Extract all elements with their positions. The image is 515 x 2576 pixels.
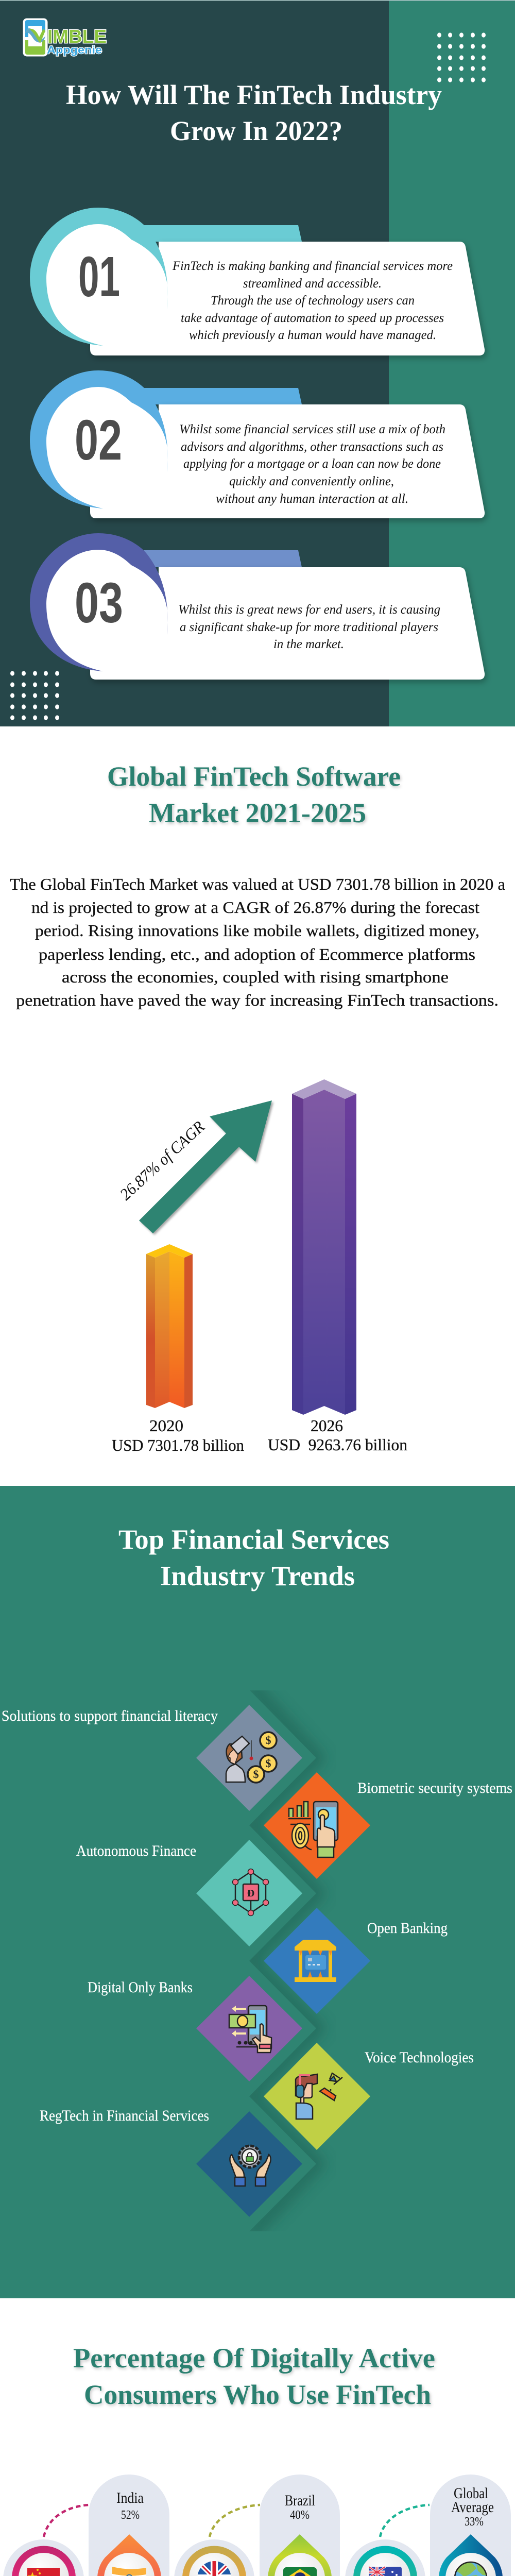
- icon: biometric phone: [288, 1802, 338, 1857]
- text block: market paragraph: The Global FinTech Market was valued at USD 7301.78 billion in 2020 a: [10, 875, 505, 893]
- heading: Global FinTech Software Market: Market 2021-2025: [149, 798, 366, 828]
- pin: Australia: [345, 2539, 425, 2576]
- text block 01: Through the use of technology users can: [211, 294, 415, 308]
- label: Brazil: [285, 2492, 315, 2522]
- icon: mobile money: [229, 2006, 271, 2053]
- pin: India: [89, 2475, 169, 2576]
- heading: Percentage Of Digitally Active Consumers: Percentage Of Digitally Active: [73, 2343, 435, 2374]
- heading: Global FinTech Software Market: [107, 761, 401, 828]
- diamond: financial literacy: [2, 1705, 302, 1811]
- arrow: growth: [139, 1100, 272, 1233]
- bar chart: 2020 vs 2026: [112, 1079, 407, 1454]
- diamond: digital only banks: [88, 1976, 302, 2081]
- text block 03: [178, 603, 440, 651]
- text block 02: Whilst some financial services still use a mix of both: [179, 422, 445, 436]
- card 02: [30, 370, 485, 518]
- label: 2020 value: [112, 1416, 244, 1454]
- logo: Nimble Appgenie: IMBLE: [47, 26, 107, 47]
- heading: Top Financial Services Industry Trends: Top Financial Services: [118, 1524, 389, 1555]
- text block 01: streamlined and accessible.: [243, 277, 382, 291]
- text block 01: FinTech is making banking and financial services more: [172, 259, 453, 273]
- diamond: financial literacy: $: [266, 1734, 271, 1747]
- icon: hands gear lock: [230, 2146, 271, 2186]
- number 02: 02: [75, 409, 122, 472]
- text block: market paragraph: [10, 875, 505, 1009]
- icon: bank with card: [295, 1940, 336, 1982]
- pin: China: [3, 2539, 84, 2576]
- text block 02: advisors and algorithms, other transactions such as: [181, 440, 443, 454]
- diamond: voice technologies: [264, 2043, 474, 2150]
- label: 2020 value: USD 7301.78 billion: [112, 1436, 244, 1454]
- label: India: India: [116, 2489, 144, 2506]
- text block: market paragraph: paperless lending, etc., and adoption of Ecommerce platforms: [39, 945, 475, 963]
- number 01: 01: [78, 245, 120, 309]
- text block 01: [172, 259, 453, 342]
- text block 03: a significant shake-up for more traditional players: [180, 620, 438, 634]
- text block 02: quickly and conveniently online,: [229, 474, 394, 488]
- panel: industry trends section: [0, 1486, 515, 2298]
- card 01: [30, 208, 485, 355]
- icon: graduate with coins: [226, 1732, 277, 1783]
- title: [66, 79, 442, 146]
- heading: Global FinTech Software Market: Global FinTech Software: [107, 761, 401, 792]
- label: Brazil: Brazil: [285, 2492, 315, 2509]
- label: autonomous: Autonomous Finance: [76, 1842, 196, 1859]
- pin: UK: [174, 2539, 254, 2576]
- card 03: [30, 533, 485, 680]
- label: Global Average: Global: [454, 2485, 488, 2502]
- label: 2026 value: 2026: [311, 1416, 343, 1435]
- label: financial literacy: Solutions to support financial literacy: [2, 1707, 218, 1724]
- dots: top right pattern: [437, 32, 486, 82]
- label: Brazil: 40%: [290, 2509, 310, 2522]
- number 03: 03: [75, 571, 123, 635]
- panel: digitally active consumers section: [3, 2348, 511, 2576]
- text block: market paragraph: across the economies, coupled with rising smartphone: [62, 968, 449, 986]
- icon: voice person: [296, 2073, 342, 2119]
- label: 2020 value: 2020: [149, 1416, 183, 1435]
- label: 2026 value: USD 9263.76 billion: [268, 1435, 407, 1454]
- logo: Nimble Appgenie: Appgenie: [47, 44, 102, 56]
- heading: Percentage Of Digitally Active Consumers: Consumers Who Use FinTech: [84, 2379, 431, 2410]
- text block: market paragraph: penetration have paved the way for increasing FinTech transactions.: [16, 991, 499, 1009]
- heading: Top Financial Services Industry Trends: Industry Trends: [160, 1561, 355, 1591]
- text block 02: without any human interaction at all.: [216, 492, 408, 506]
- label: Global Average: Average: [451, 2499, 494, 2516]
- diamond: open banking: [264, 1908, 448, 2014]
- label: CAGR: 26.87% of CAGR: [116, 1117, 208, 1204]
- heading: Top Financial Services Industry Trends: [118, 1524, 389, 1591]
- panel: intro section: [0, 0, 515, 726]
- label: 2026 value: [268, 1416, 407, 1454]
- bar: 2020: [146, 1244, 193, 1408]
- title: How Will The FinTech Industry: [66, 79, 442, 110]
- text block 02: applying for a mortgage or a loan can now be done: [183, 457, 441, 471]
- diamond: autonomous finance: Ð: [247, 1888, 254, 1899]
- diamond: biometric security: [264, 1772, 512, 1879]
- diamond: regtech: [40, 2107, 302, 2217]
- icon: blockchain network: [233, 1869, 269, 1916]
- label: voice technologies: Voice Technologies: [365, 2049, 474, 2066]
- text block 03: Whilst this is great news for end users, it is causing: [178, 603, 440, 617]
- title: Grow In 2022?: [170, 115, 342, 146]
- text block 03: in the market.: [273, 637, 344, 651]
- connectors: dashed arcs: [44, 2505, 430, 2576]
- diamond: financial literacy: $: [253, 1768, 259, 1781]
- text block 01: take advantage of automation to speed up processes: [181, 311, 444, 325]
- pin: Brazil: [260, 2475, 340, 2576]
- text block: market paragraph: nd is projected to grow at a CAGR of 26.87% during the forecast: [31, 898, 479, 917]
- label: Global Average: 33%: [465, 2515, 484, 2529]
- label: India: [116, 2489, 144, 2522]
- label: open banking: Open Banking: [367, 1920, 448, 1937]
- diamond: financial literacy: $: [266, 1757, 271, 1770]
- pin: Global Average: [430, 2475, 511, 2576]
- bar: 2026: [292, 1079, 356, 1415]
- label: regtech: RegTech in Financial Services: [40, 2107, 209, 2124]
- heading: Percentage Of Digitally Active Consumers: [73, 2343, 435, 2410]
- label: India: 52%: [121, 2509, 140, 2522]
- panel: market section: [0, 726, 515, 1486]
- text block 01: which previously a human would have managed.: [189, 328, 436, 342]
- logo: Nimble Appgenie: [24, 19, 107, 56]
- text block 02: [179, 422, 445, 506]
- dots: bottom left pattern: [10, 671, 59, 720]
- text block: market paragraph: period. Rising innovations like mobile wallets, digitized money,: [35, 921, 479, 940]
- diamond: autonomous finance: [76, 1840, 302, 1946]
- label: digital only banks: Digital Only Banks: [88, 1979, 193, 1996]
- label: Global Average: [451, 2485, 494, 2529]
